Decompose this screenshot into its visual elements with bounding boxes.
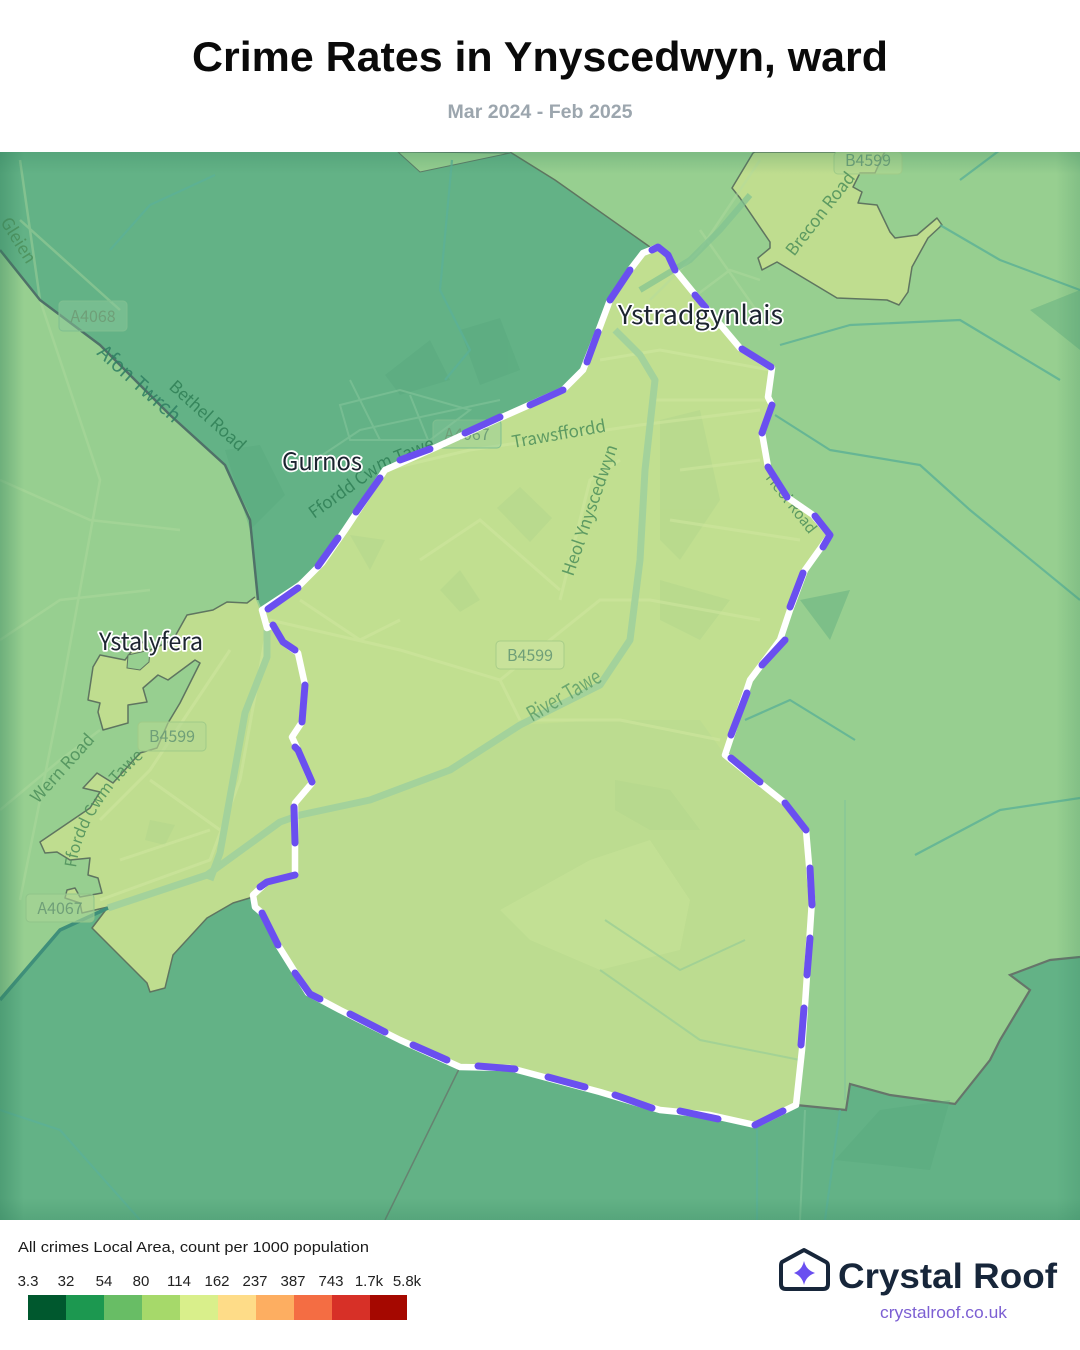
- legend values: 5.8k: [393, 1273, 422, 1290]
- legend values: 237: [242, 1273, 268, 1290]
- legend colour scale: [28, 1295, 407, 1320]
- choropleth map: [0, 152, 1080, 1220]
- road shield B4599 centre: [496, 641, 564, 669]
- road shield B4599 north: [834, 152, 902, 174]
- logo wordmark: Crystal Roof: [838, 1257, 1057, 1296]
- area: southern lower-rate part of ward: [253, 720, 812, 1125]
- area: Ynyscedwyn ward fill: [266, 251, 826, 808]
- legend values: 3.3: [18, 1273, 38, 1290]
- Ynyscedwyn ward outline: white: [253, 247, 830, 1125]
- base area: mid-rate green: [0, 152, 1080, 1109]
- patches: darker land use: [145, 410, 730, 845]
- area: dark green south: [0, 897, 1080, 1220]
- road shield A4067 north: [433, 420, 501, 448]
- area: small strip at top: [398, 152, 510, 172]
- label: Heol Ynyscedwyn: Heol Ynyscedwyn: [554, 441, 622, 579]
- subtitle: date range: Mar 2024 - Feb 2025: [448, 102, 633, 123]
- area: neighbouring ward Ystalyfera: [40, 597, 320, 992]
- icon: house with star: [781, 1250, 828, 1289]
- town label: Ystradgynlais: Ystradgynlais: [617, 295, 783, 332]
- road shield B4599 north: B4599: [845, 147, 891, 171]
- road shield A4067 west: [26, 894, 94, 922]
- label: Afon Twrch: Afon Twrch: [92, 337, 189, 428]
- legend values: 1.7k: [355, 1273, 384, 1290]
- boundary line north: [510, 152, 650, 247]
- road shield A4068: A4068: [70, 303, 116, 327]
- legend values: 32: [58, 1273, 74, 1290]
- river Twrch: [0, 250, 258, 1000]
- area: hole in Ystalyfera ward: [127, 650, 150, 670]
- label: road north-east: Heol Road: [761, 468, 822, 538]
- label: Wern Road: Wern Road: [23, 727, 99, 807]
- label: Bethel Road: Bethel Road: [165, 373, 253, 456]
- area: north-east ward by Brecon Road: [732, 152, 942, 305]
- legend values: 743: [318, 1273, 344, 1290]
- area: higher-rate dark green north: [0, 152, 650, 610]
- legend values: 54: [96, 1273, 112, 1290]
- map labels: [2, 152, 902, 922]
- road shield A4068: [59, 301, 127, 331]
- boundary of Ystalyfera ward: [40, 597, 255, 992]
- patches: dark green built-up areas: [225, 290, 1080, 1170]
- label: Ffordd Cwm Tawe west: Ffordd Cwm Tawe: [64, 752, 142, 866]
- label: Brecon Road: Brecon Road: [778, 165, 860, 260]
- legend values: [18, 1273, 422, 1290]
- legend values: 162: [204, 1273, 230, 1290]
- legend title: All crimes Local Area, count per 1000 population: [18, 1239, 369, 1256]
- road shield B4599 west: B4599: [149, 723, 195, 747]
- road shield A4067 north: A4067: [444, 421, 490, 445]
- legend values: 80: [133, 1273, 149, 1290]
- legend values: 387: [280, 1273, 306, 1290]
- patches: lighter woodland clearing: [500, 840, 690, 970]
- road shield B4599 west: [138, 722, 206, 751]
- road shield A4067 west: A4067: [37, 895, 83, 919]
- logo url: crystalroof.co.uk: [880, 1303, 1008, 1322]
- title: Crime Rates in Ynyscedwyn, ward: [192, 33, 888, 80]
- legend values: 114: [167, 1273, 191, 1290]
- streams: [0, 150, 1080, 1220]
- town label: Gurnos: Gurnos: [282, 442, 362, 477]
- label: Ffordd Cwm Tawe north: Ffordd Cwm Tawe: [308, 440, 433, 518]
- road network: [100, 350, 800, 900]
- label: Trawsffordd: Trawsffordd: [510, 412, 608, 453]
- label: River Tawe: River Tawe: [520, 661, 607, 728]
- town label: Ystalyfera: Ystalyfera: [98, 622, 203, 657]
- boundary line south-east: [796, 957, 1080, 1110]
- road shield B4599 centre: B4599: [507, 642, 553, 666]
- river Tawe: [108, 330, 655, 908]
- logo: Crystal Roof: [781, 1250, 1057, 1322]
- Ynyscedwyn ward outline: purple dashes: [260, 247, 830, 1125]
- legend: [18, 1239, 422, 1320]
- map edge vignette: [0, 152, 1080, 1220]
